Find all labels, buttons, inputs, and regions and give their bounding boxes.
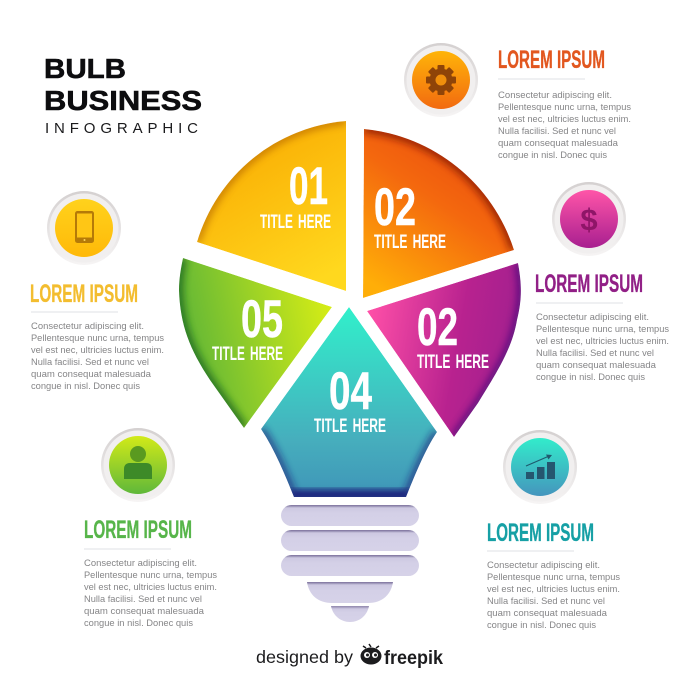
bulb segment 01 yellow: 01 — [289, 157, 328, 216]
panel: left text: Consectetur adipiscing elit. — [31, 321, 144, 331]
panel: left text: Nulla facilisi. Sed et nunc vel — [31, 357, 149, 367]
bulb segment 03 magenta: TITLE HERE — [417, 351, 489, 373]
bulb segment 02 orange: 02 — [374, 178, 416, 237]
bulb segment 05 green: 05 — [241, 290, 283, 349]
icon: person — [101, 428, 175, 502]
panel: bottom left text — [84, 516, 217, 628]
panel: bottom left text: Pellentesque nunc urna, tempus — [84, 570, 217, 580]
panel: left text: LOREM IPSUM — [30, 280, 138, 308]
panel: bottom right text: congue in nisl. Donec quis — [487, 620, 596, 630]
panel: bottom left text: Consectetur adipiscing elit. — [84, 558, 197, 568]
icon: dollar — [552, 182, 626, 256]
panel: bottom right text — [487, 519, 620, 630]
footer credit: designed by — [256, 647, 353, 667]
panel: right text: congue in nisl. Donec quis — [536, 372, 645, 382]
title: INFOGRAPHIC — [45, 120, 198, 137]
bulb segment 03 magenta — [367, 263, 521, 437]
title — [44, 53, 202, 137]
panel: right text — [535, 270, 669, 382]
panel: left text — [30, 280, 164, 391]
bulb screw base — [278, 501, 422, 623]
footer credit: freepik — [384, 648, 443, 669]
panel: right text: Consectetur adipiscing elit. — [536, 312, 649, 322]
panel: right text: vel est nec, ultricies luctus enim. — [536, 336, 669, 346]
panel: bottom right text: LOREM IPSUM — [487, 519, 594, 547]
panel: bottom left text: vel est nec, ultricies luctus enim. — [84, 582, 217, 592]
panel: right text: quam consequat malesuada — [536, 360, 657, 370]
icon: growth chart — [503, 430, 577, 504]
panel: bottom right text: Pellentesque nunc urna, tempus — [487, 572, 620, 582]
icon: phone — [47, 191, 121, 265]
title: BULB — [44, 53, 126, 84]
panel: bottom right text: Nulla facilisi. Sed et nunc vel — [487, 596, 605, 606]
panel: left text: congue in nisl. Donec quis — [31, 381, 140, 391]
panel: left text: Pellentesque nunc urna, tempus — [31, 333, 164, 343]
panel: bottom left text: LOREM IPSUM — [84, 516, 192, 544]
panel: bottom right text: Consectetur adipiscing elit. — [487, 560, 600, 570]
panel: bottom left text: congue in nisl. Donec quis — [84, 618, 193, 628]
bulb segment 01 yellow: TITLE HERE — [260, 211, 331, 233]
panel: left text: quam consequat malesuada — [31, 369, 152, 379]
panel: top right text: LOREM IPSUM — [498, 46, 605, 74]
bulb segment 04 teal — [261, 307, 437, 499]
panel: left text: vel est nec, ultricies luctus enim. — [31, 345, 164, 355]
panel: bottom left text: quam consequat malesuada — [84, 606, 205, 616]
panel: top right text: Nulla facilisi. Sed et nunc vel — [498, 126, 616, 136]
bulb segment 01 yellow — [197, 121, 346, 291]
bulb segment 02 orange: TITLE HERE — [374, 231, 446, 253]
bulb segment 04 teal: TITLE HERE — [314, 415, 386, 437]
panel: top right text: Consectetur adipiscing elit. — [498, 90, 612, 100]
panel: top right text: Pellentesque nunc urna, tempus — [498, 102, 631, 112]
icon: dollar: $ — [580, 202, 598, 237]
panel: top right text: quam consequat malesuada — [498, 138, 619, 148]
bulb segment 02 orange — [363, 129, 514, 298]
title: BUSINESS — [44, 85, 202, 116]
panel: top right text: vel est nec, ultricies luctus enim. — [498, 114, 631, 124]
panel: right text: Nulla facilisi. Sed et nunc vel — [536, 348, 654, 358]
bulb segment 04 teal: 04 — [329, 362, 372, 421]
bulb segment 05 green — [179, 258, 332, 428]
panel: bottom right text: vel est nec, ultricies luctus enim. — [487, 584, 620, 594]
footer credit — [256, 644, 443, 669]
bulb segment 03 magenta: 02 — [417, 298, 458, 357]
panel: top right text — [498, 46, 631, 160]
bulb segment 05 green: TITLE HERE — [212, 343, 283, 365]
panel: top right text: congue in nisl. Donec quis — [498, 150, 607, 160]
icon: gear — [404, 43, 478, 117]
panel: bottom right text: quam consequat malesuada — [487, 608, 608, 618]
panel: bottom left text: Nulla facilisi. Sed et nunc vel — [84, 594, 202, 604]
panel: right text: Pellentesque nunc urna, tempus — [536, 324, 669, 334]
